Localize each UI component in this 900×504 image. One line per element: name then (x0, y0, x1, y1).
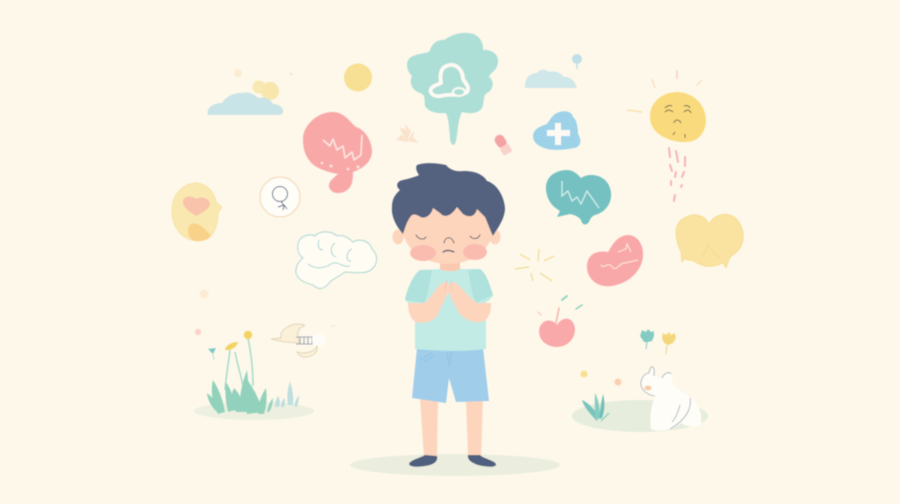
decorative pink dot (195, 329, 201, 335)
icon: left cloud with yellow blob (208, 80, 283, 115)
boy character (392, 163, 505, 467)
icon: pink heart with zigzag (587, 235, 643, 286)
boy neck (440, 262, 460, 271)
boy ground shadow (350, 454, 560, 476)
boy legs (420, 398, 483, 458)
icon: small leaf (396, 124, 419, 143)
icon: pink apple (538, 296, 582, 347)
boy shirt (405, 269, 493, 351)
right leaf plant (582, 393, 609, 421)
boy face (402, 188, 494, 264)
decorative dot (200, 290, 208, 298)
icon: pink speech bubble with heartbeat (303, 112, 372, 193)
icon: pink rain drops (669, 148, 685, 201)
right ground shadow (572, 400, 708, 432)
boy hair (392, 163, 505, 236)
icon: yellow head with heart (172, 183, 222, 241)
icon: sad yellow sun (627, 70, 706, 142)
boy shorts pocket lines (420, 352, 451, 366)
icon: brain outline (296, 232, 376, 288)
icon: sparkle lines (515, 249, 554, 281)
boy sleeves shade (405, 269, 493, 303)
small flowers near ground (580, 370, 622, 386)
left grass and dandelions (207, 331, 299, 414)
icon: teal thought bubble with bell (407, 33, 498, 145)
icon: yellow circle (344, 64, 372, 92)
icon: blue medical cross bubble (533, 111, 580, 150)
icon: teal and yellow flowers (640, 329, 676, 354)
icon: yellow split heart (676, 214, 743, 268)
icon: pill (493, 133, 513, 156)
icon: white rabbit (641, 367, 701, 431)
decorative dots top left (234, 69, 292, 77)
boy shoes (409, 455, 496, 467)
boy closed eyes, nose and mouth (416, 235, 480, 252)
left ground shadow (194, 402, 314, 420)
icon: round badge with figure (260, 177, 300, 217)
icon: syringe sketch (271, 324, 335, 357)
boy arms and hands (408, 280, 491, 323)
icon: right cloud and balloon (525, 54, 582, 88)
icon: teal heart bubble (546, 170, 611, 224)
boy ears (392, 230, 500, 244)
boy shorts (412, 348, 489, 403)
boy cheeks (410, 244, 487, 261)
